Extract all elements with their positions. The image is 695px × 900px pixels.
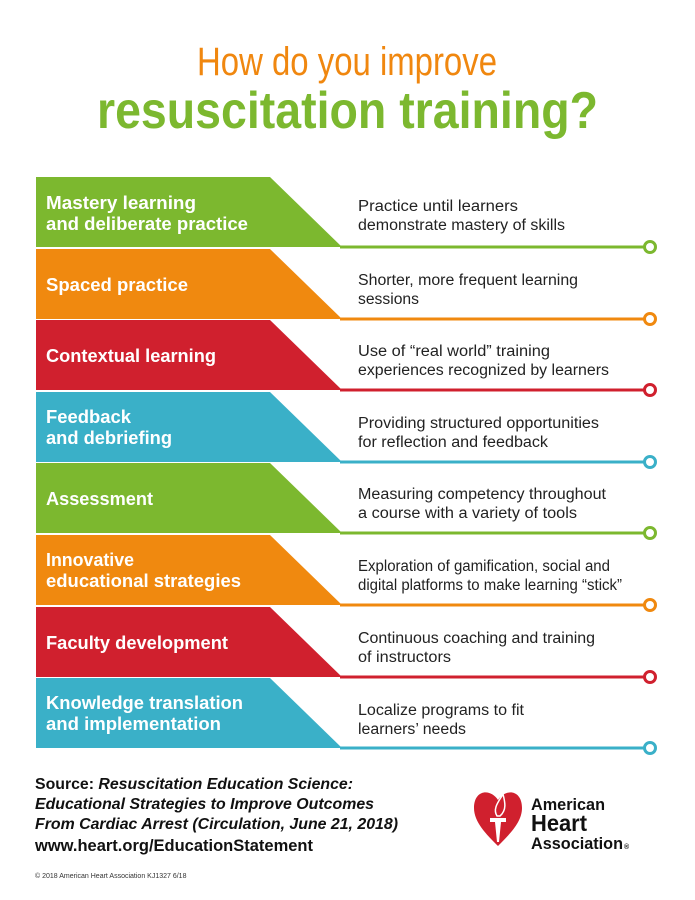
row 7: faculty development xyxy=(36,607,656,682)
row 6: innovative strategies: educational strategies xyxy=(46,571,241,591)
logo: American Heart Association: American xyxy=(531,795,605,814)
row 8: knowledge translation: learners’ needs xyxy=(358,721,466,738)
row 1: mastery learning: demonstrate mastery of skills xyxy=(358,217,565,234)
row 1: mastery learning: and deliberate practice xyxy=(46,214,248,234)
row 6: innovative strategies xyxy=(36,535,656,610)
row 1: mastery learning: Mastery learning xyxy=(46,193,196,213)
row 7: faculty development: Faculty development xyxy=(46,633,228,653)
row 5: assessment: Measuring competency throughout xyxy=(358,486,607,503)
row 4: feedback: and debriefing xyxy=(46,428,172,448)
source text: www.heart.org/EducationStatement xyxy=(34,837,314,855)
row 1: mastery learning xyxy=(36,177,656,252)
row 2: spaced practice: sessions xyxy=(358,291,419,308)
row 3: contextual learning: Contextual learning xyxy=(46,346,216,366)
row 7: faculty development: of instructors xyxy=(358,649,451,666)
row 3: contextual learning: experiences recognized by learners xyxy=(358,362,609,379)
row 1: mastery learning: Practice until learners xyxy=(358,198,518,215)
title: How do you improve xyxy=(197,40,497,84)
row 8: knowledge translation: Localize programs to fit xyxy=(358,702,525,719)
row 3: contextual learning xyxy=(36,320,656,396)
row 7: faculty development: Continuous coaching and training xyxy=(358,630,595,647)
row 6: innovative strategies: digital platforms to make learning “stick” xyxy=(358,577,622,594)
logo: American Heart Association: Heart xyxy=(531,810,587,836)
row 5: assessment: a course with a variety of tools xyxy=(358,505,577,522)
row 4: feedback: Feedback xyxy=(46,407,132,427)
row 6: innovative strategies: Exploration of gamification, social and xyxy=(358,558,610,575)
row 4: feedback xyxy=(36,392,656,468)
row 8: knowledge translation: Knowledge translation xyxy=(46,693,243,713)
copyright: © 2018 American Heart Association KJ1327 6/18 xyxy=(35,872,187,880)
row 2: spaced practice: Spaced practice xyxy=(46,275,188,295)
row 2: spaced practice: Shorter, more frequent learning xyxy=(358,272,578,289)
row 5: assessment xyxy=(36,463,656,538)
source text: From Cardiac Arrest (Circulation, June 21, 2018) xyxy=(35,816,398,833)
row 5: assessment: Assessment xyxy=(46,489,153,509)
logo: American Heart Association: ® xyxy=(624,843,630,851)
logo: American Heart Association: Association xyxy=(531,834,623,853)
row 6: innovative strategies: Innovative xyxy=(46,550,134,570)
source text xyxy=(34,776,398,855)
row 8: knowledge translation: and implementation xyxy=(46,714,221,734)
title: resuscitation training? xyxy=(97,82,598,140)
source text: Educational Strategies to Improve Outcomes xyxy=(35,796,374,813)
row 3: contextual learning: Use of “real world” training xyxy=(358,343,550,360)
row 4: feedback: Providing structured opportunities xyxy=(358,415,599,432)
title xyxy=(97,40,598,140)
row 4: feedback: for reflection and feedback xyxy=(358,434,548,451)
row 2: spaced practice xyxy=(36,249,656,324)
row 8: knowledge translation xyxy=(36,678,656,754)
logo: American Heart Association xyxy=(474,792,630,853)
source text: Source: Resuscitation Education Science: xyxy=(35,776,353,793)
